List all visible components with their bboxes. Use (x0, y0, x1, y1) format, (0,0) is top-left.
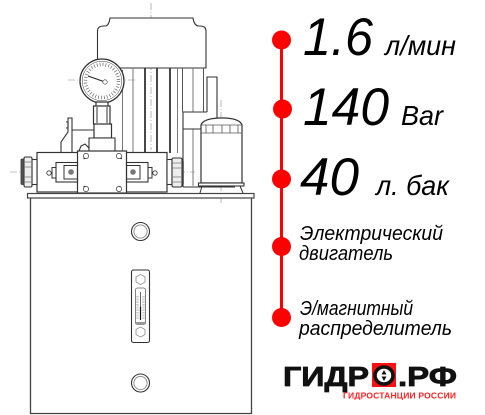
bullet: pressure (273, 100, 292, 118)
electric motor (98, 18, 235, 187)
plug bottom (132, 374, 150, 392)
bullet: flow (272, 30, 291, 50)
bullet: tank (272, 170, 291, 188)
solenoid left (21, 157, 78, 187)
flow value (303, 8, 456, 67)
hydraulic station drawing (10, 3, 254, 414)
plug top (132, 222, 150, 240)
logo: ГИДРОСТАНЦИИ РОССИИ (343, 390, 456, 400)
logo: .РФ (398, 361, 457, 392)
tank (30, 198, 252, 414)
right end plug (167, 158, 183, 187)
valve label (298, 298, 452, 340)
tank value (300, 148, 451, 207)
left end plug (21, 157, 37, 187)
valve label: Э/магнитный (300, 298, 413, 320)
bullet: valve (272, 308, 291, 327)
tank top plate (28, 194, 254, 198)
logo red square (372, 363, 396, 387)
level gauge (132, 270, 150, 342)
pressure gauge (80, 59, 124, 138)
manifold block (37, 138, 167, 193)
logo ring (375, 367, 393, 384)
pressure value: Bar (401, 100, 445, 131)
red connector line (280, 40, 283, 317)
tank value: л. бак (374, 170, 451, 201)
tank value: 40 (300, 148, 360, 207)
bracket (61, 118, 94, 152)
pressure value: 140 (303, 78, 390, 137)
bullet: motor (272, 237, 291, 256)
solenoid right (126, 158, 183, 187)
motor label: двигатель (299, 243, 393, 265)
logo (283, 361, 457, 400)
flow value: л/мин (383, 30, 456, 61)
oil filter (198, 118, 244, 193)
flow value: 1.6 (303, 8, 373, 67)
center lines (10, 3, 221, 204)
pressure value (303, 78, 445, 137)
valve label: распределитель (298, 318, 452, 340)
motor label (299, 223, 443, 265)
logo: ГИДР (283, 361, 369, 392)
motor label: Электрический (300, 223, 443, 245)
